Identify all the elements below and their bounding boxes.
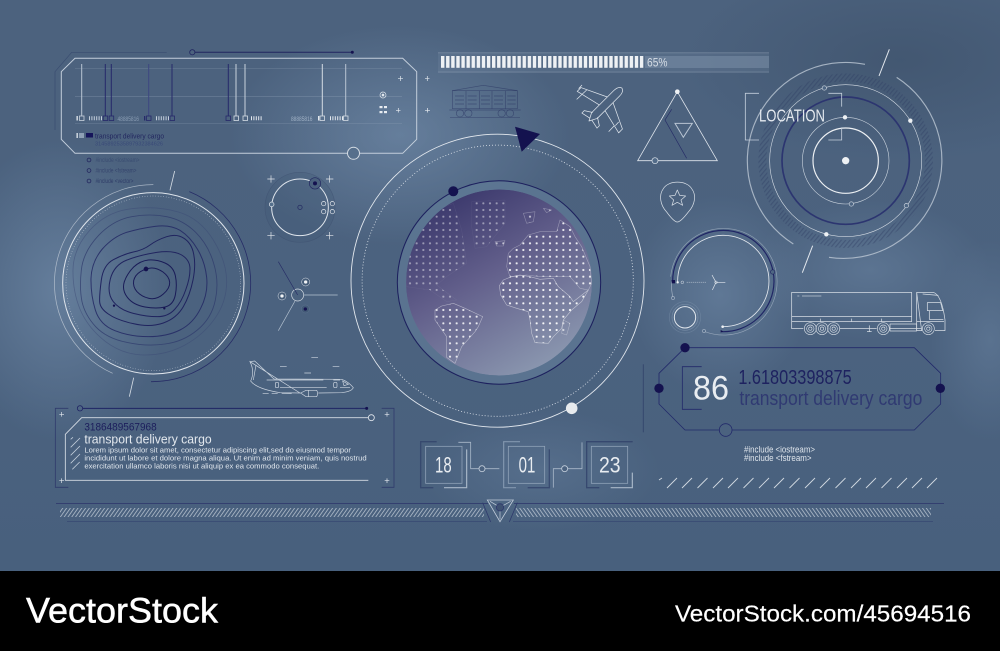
include text: #include <fstream> bbox=[744, 453, 812, 464]
side controls bbox=[380, 76, 430, 113]
text panel: transport delivery cargo: 3186489567968 bbox=[84, 422, 157, 434]
panel: 86 cargo readout: 1.61803398875 bbox=[738, 366, 852, 389]
text panel: transport delivery cargo: transport delivery cargo bbox=[84, 431, 212, 446]
panel caption bbox=[76, 132, 164, 148]
south america bbox=[435, 303, 483, 363]
barcode numbers bbox=[118, 117, 313, 123]
icon: bottom triangle emblem bbox=[483, 500, 517, 522]
include list: #include <iostream> bbox=[96, 158, 140, 164]
panel: barcode scanner bbox=[55, 50, 430, 159]
islands bbox=[495, 208, 570, 335]
box: 23 bbox=[587, 442, 633, 488]
box: 18: 18 bbox=[435, 452, 452, 477]
text panel: transport delivery cargo bbox=[55, 406, 394, 487]
icon: truck bbox=[792, 292, 945, 335]
orbit widget bbox=[265, 172, 335, 242]
progress bar: 65% bbox=[647, 56, 668, 70]
contour map circle bbox=[54, 171, 251, 397]
box: 18 bbox=[421, 442, 499, 488]
include list bbox=[87, 158, 140, 185]
include list: #include <vector> bbox=[96, 179, 134, 185]
box: 01: 01 bbox=[519, 452, 535, 477]
image url: VectorStock.com/45694516 bbox=[675, 601, 971, 627]
brand name: VectorStock bbox=[26, 592, 219, 631]
include text: #include <iostream> bbox=[744, 444, 815, 455]
eurasia bbox=[507, 220, 592, 290]
include list: #include <fstream> bbox=[96, 168, 137, 174]
box: 23: 23 bbox=[599, 452, 621, 477]
orbit markers bbox=[448, 127, 578, 414]
date boxes bbox=[421, 442, 633, 488]
panel caption: transport delivery cargo bbox=[95, 132, 164, 140]
panel caption: 3145892535897932384626 bbox=[95, 142, 163, 148]
africa bbox=[499, 275, 588, 343]
footer: watermark bar bbox=[0, 571, 1000, 651]
barcode bars bbox=[76, 64, 348, 120]
text panel: transport delivery cargo: exercitation ullamco laboris nisi ut aliquip ex ea commodo consequat. bbox=[84, 463, 319, 470]
icon: freight wagon bbox=[449, 85, 521, 117]
include text bbox=[744, 444, 815, 464]
barcode numbers: 48885816 bbox=[118, 117, 140, 123]
barcode numbers: 88885816 bbox=[291, 117, 313, 123]
text panel: transport delivery cargo: incididunt ut labore et dolore magna aliqua. Ut enim ad minim veniam, quis nostrud bbox=[84, 456, 367, 463]
box: 01 bbox=[504, 442, 582, 488]
icon: airplane bbox=[568, 67, 643, 142]
panel: 86 cargo readout bbox=[643, 343, 945, 436]
icon: triangle bbox=[638, 89, 717, 164]
clock gauge bbox=[669, 228, 777, 335]
panel: 86 cargo readout: 86 bbox=[693, 369, 729, 407]
globe rings bbox=[351, 134, 644, 427]
world map globe bbox=[405, 190, 592, 376]
north america bbox=[405, 203, 467, 302]
location radar bbox=[745, 49, 942, 273]
three-spoke widget bbox=[278, 262, 338, 331]
panel: 86 cargo readout: transport delivery cargo bbox=[739, 387, 922, 410]
slashes row bbox=[659, 478, 937, 488]
greenland bbox=[472, 200, 505, 248]
text panel: transport delivery cargo: Lorem ipsum dolor sit amet, consectetur adipiscing elit,sed do eiusmod tempor bbox=[84, 448, 352, 455]
progress bar bbox=[438, 52, 769, 72]
icon: map pin with star bbox=[661, 182, 695, 222]
bottom hatch strip bbox=[56, 503, 944, 522]
icon: side-view airplane bbox=[250, 357, 353, 397]
location radar: LOCATION bbox=[759, 106, 825, 126]
